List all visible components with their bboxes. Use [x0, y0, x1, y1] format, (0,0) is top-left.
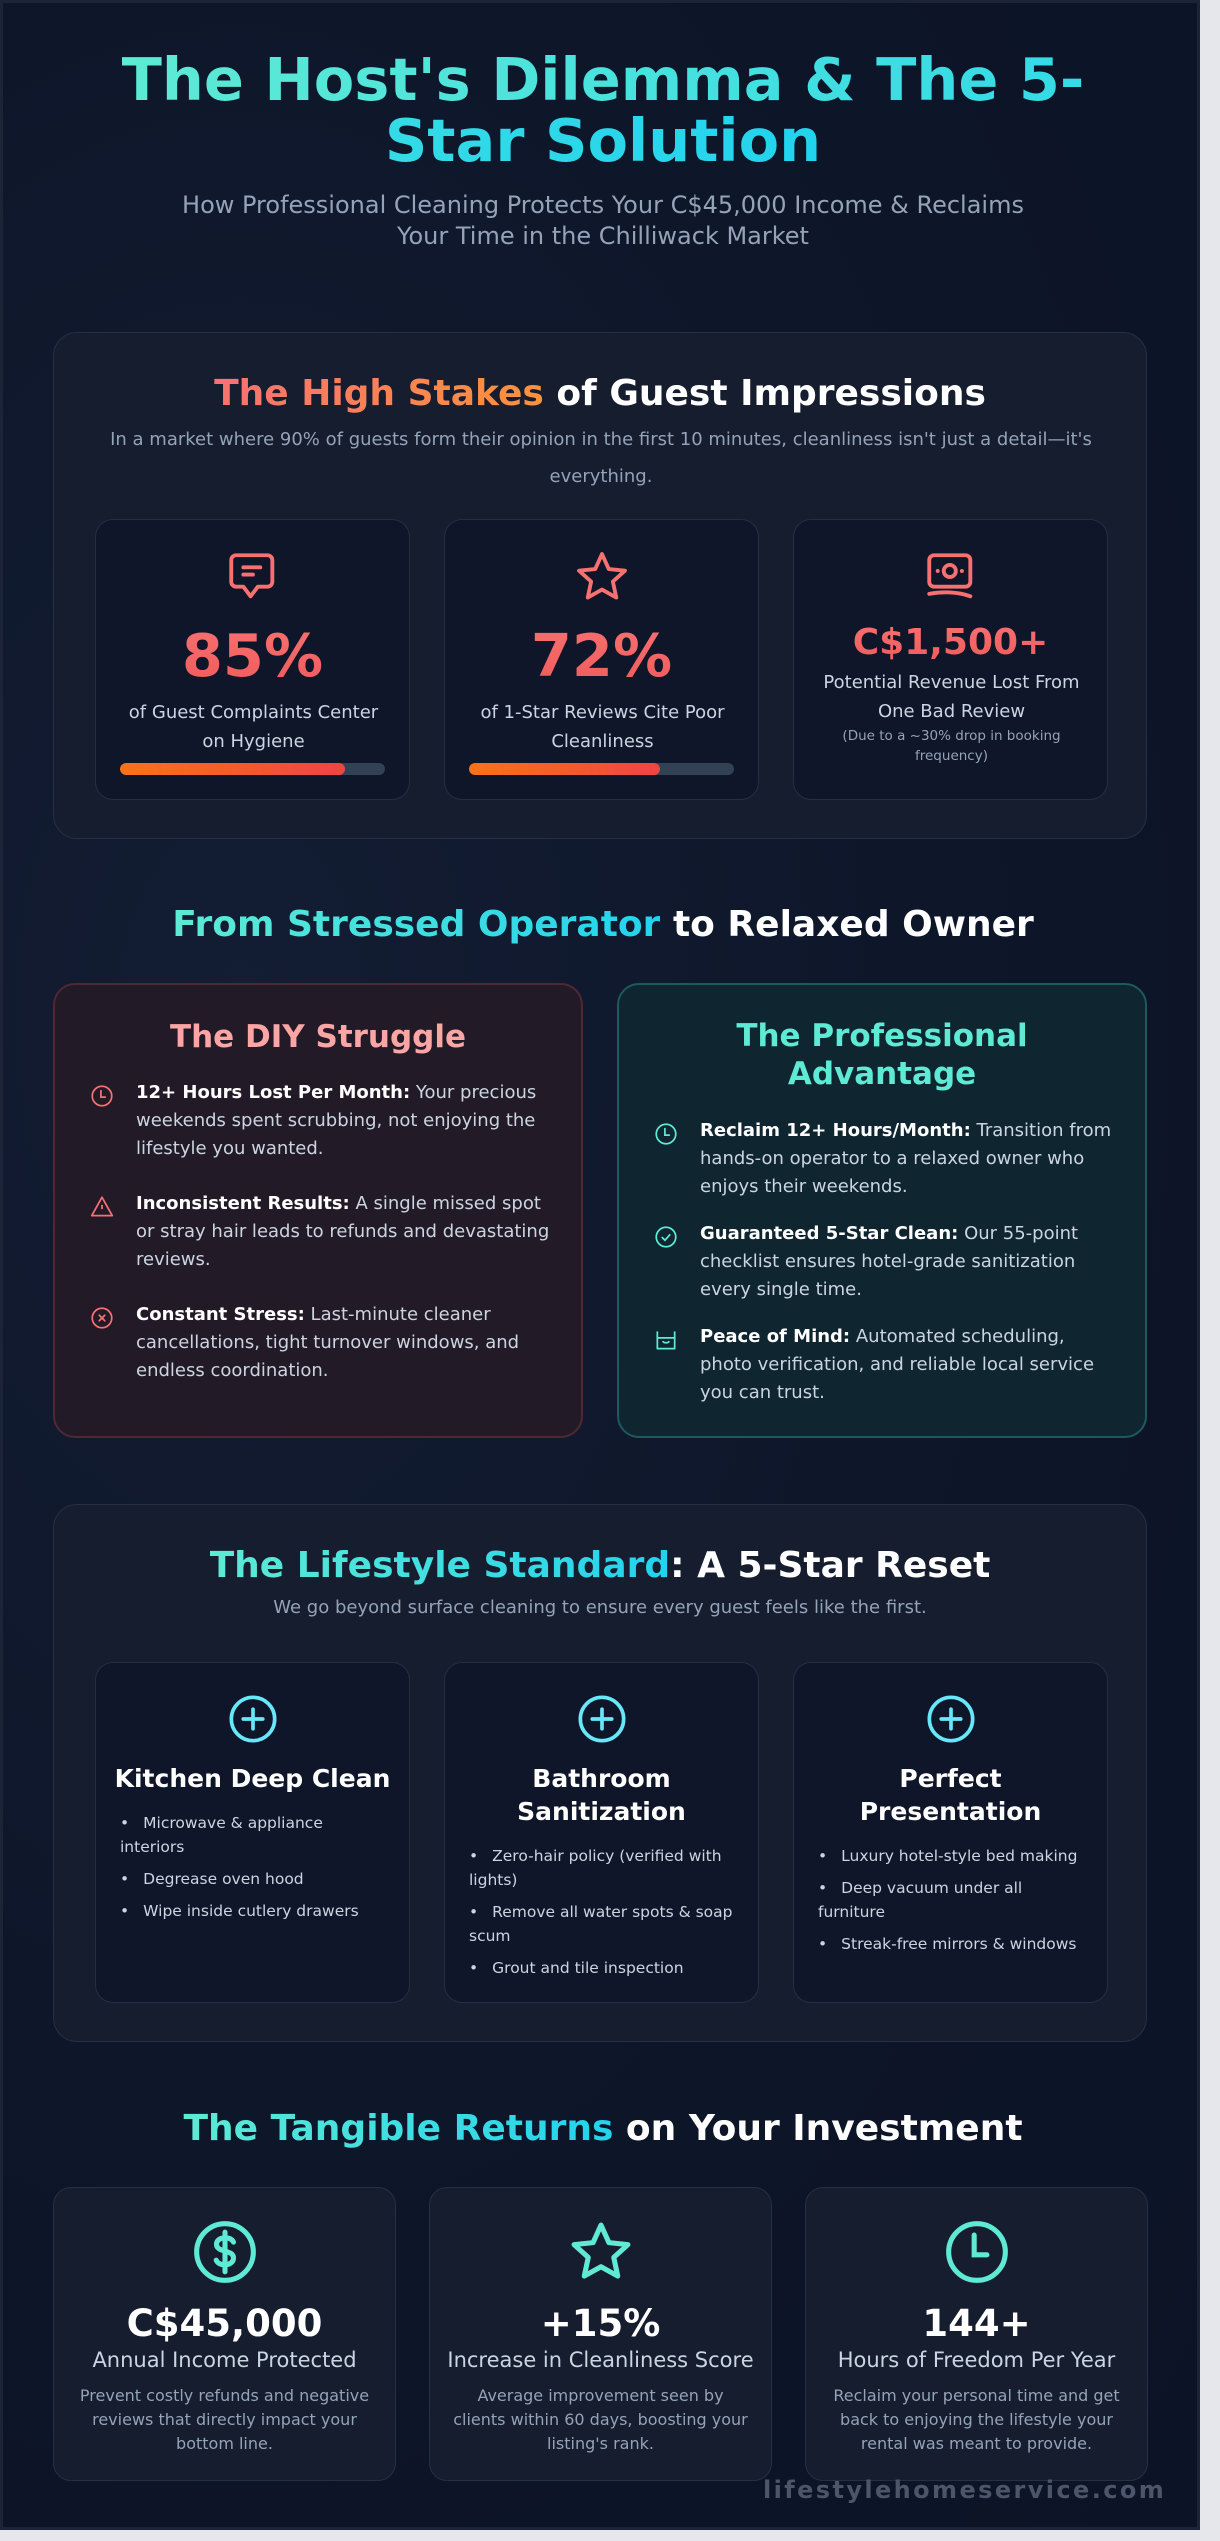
heading: high stakes: The High Stakes of Guest Impressions: [214, 373, 986, 414]
progress bar: [120, 763, 385, 775]
card: kitchen: [95, 1662, 410, 2003]
panel: high stakes: [53, 332, 1147, 839]
card: bathroom: [444, 1662, 759, 2003]
subtitle: [182, 191, 1024, 250]
card title: Sanitization: [517, 1797, 686, 1826]
bullets: Zero-hair policy (verified with lights): [469, 1847, 722, 1889]
label: Annual Income Protected: [92, 2348, 357, 2372]
stat label: Potential Revenue Lost From One Bad Review: [823, 672, 1080, 722]
card: income: [53, 2187, 396, 2481]
bullets: [120, 1814, 359, 1920]
stat card: 85%: [95, 519, 410, 800]
intro text: We go beyond surface cleaning to ensure every guest feels like the first.: [273, 1597, 927, 1618]
title: Star Solution: [385, 106, 821, 175]
panel: lifestyle standard: [53, 1504, 1147, 2042]
card title: Presentation: [860, 1797, 1041, 1826]
heading: professional: Advantage: [788, 1056, 976, 1092]
stat value: 85%: [182, 621, 323, 690]
bullets: Luxury hotel-style bed making: [841, 1847, 1077, 1865]
progress bar: [469, 763, 734, 775]
title: [122, 45, 1084, 175]
card: hours: [805, 2187, 1148, 2481]
card title: [860, 1764, 1041, 1826]
subtitle: Your Time in the Chilliwack Market: [397, 222, 809, 250]
bullets: Streak-free mirrors & windows: [841, 1935, 1076, 1953]
label: Hours of Freedom Per Year: [838, 2348, 1115, 2372]
stat label: of Guest Complaints Center on Hygiene: [129, 702, 378, 752]
heading: tangible returns: The Tangible Returns on Your Investment: [183, 2108, 1023, 2149]
bullets: Microwave & appliance interiors: [120, 1814, 323, 1856]
icon: money: [927, 553, 972, 598]
icon: clock: [946, 2221, 1008, 2283]
stat card: 72%: [444, 519, 759, 800]
panel: DIY struggle: [53, 983, 583, 1438]
card: cleanliness score: [429, 2187, 772, 2481]
bullets: Deep vacuum under all furniture: [818, 1879, 1022, 1921]
card title: [517, 1764, 686, 1826]
title: The Host's Dilemma & The 5-: [122, 45, 1084, 114]
bullets: [469, 1847, 732, 1977]
icon: plus: [578, 1696, 626, 1742]
card title: Bathroom: [532, 1764, 671, 1793]
heading: lifestyle: The Lifestyle Standard: A 5-Star Reset: [210, 1545, 990, 1586]
heading: professional: [736, 1018, 1028, 1092]
panel: professional advantage: [617, 983, 1147, 1438]
label: Increase in Cleanliness Score: [447, 2348, 754, 2372]
description: Average improvement seen by clients within 60 days, boosting your listing's rank.: [453, 2386, 748, 2453]
bullets: Wipe inside cutlery drawers: [143, 1902, 359, 1920]
bullets: Remove all water spots & soap scum: [469, 1903, 732, 1945]
item: hours lost: 12+ Hours Lost Per Month: Your precious weekends spent scrubbing, not enjoying the lifestyle you wanted.: [136, 1082, 536, 1159]
icon: chat: [229, 553, 274, 598]
footnote: (Due to a ~30% drop in booking frequency): [842, 728, 1061, 764]
item: reclaim: Reclaim 12+ Hours/Month: Transition from hands-on operator to a relaxed owner who enjoys their weekends.: [700, 1120, 1111, 1197]
description: Prevent costly refunds and negative reviews that directly impact your bottom line.: [80, 2386, 369, 2453]
heading: stressed to relaxed: From Stressed Operator to Relaxed Owner: [172, 904, 1034, 945]
value: +15%: [541, 2302, 660, 2345]
subtitle: How Professional Cleaning Protects Your C$45,000 Income & Reclaims: [182, 191, 1024, 219]
footer watermark: lifestylehomeservice.com: [763, 2476, 1166, 2504]
item: peace: Peace of Mind: Automated scheduling, photo verification, and reliable local service you can trust.: [700, 1326, 1094, 1403]
value: 144+: [922, 2302, 1031, 2345]
heading: DIY: The DIY Struggle: [170, 1019, 466, 1055]
icon: star: [572, 2222, 630, 2279]
icon: plus: [230, 1696, 276, 1742]
icon: dollar: [194, 2221, 256, 2283]
card: presentation: [793, 1662, 1108, 2003]
bullets: Degrease oven hood: [143, 1870, 304, 1888]
value: C$45,000: [127, 2302, 322, 2345]
bullets: Grout and tile inspection: [492, 1959, 684, 1977]
intro text: In a market where 90% of guests form their opinion in the first 10 minutes, cleanliness isn't just a detail—it's everything.: [110, 429, 1092, 487]
stat value: [445, 620, 758, 692]
bullets: [818, 1847, 1077, 1953]
stat value: [96, 620, 409, 692]
stat card: revenue: [793, 519, 1108, 800]
item: stress: Constant Stress: Last-minute cleaner cancellations, tight turnover windows, and endless coordination.: [136, 1304, 519, 1381]
card title: Kitchen Deep Clean: [115, 1764, 390, 1793]
stat value: 72%: [531, 621, 672, 690]
icon: plus: [928, 1696, 974, 1742]
icon: star: [577, 552, 627, 600]
item: inconsistent: Inconsistent Results: A single missed spot or stray hair leads to refunds and devastating reviews.: [136, 1193, 549, 1270]
item: guaranteed: Guaranteed 5-Star Clean: Our 55-point checklist ensures hotel-grade sanitization every single time.: [700, 1223, 1078, 1300]
description: Reclaim your personal time and get back to enjoying the lifestyle your rental was meant to provide.: [833, 2386, 1120, 2453]
heading: professional: The Professional: [736, 1018, 1028, 1054]
stat value: [794, 620, 1107, 666]
card title: Perfect: [899, 1764, 1002, 1793]
stat value: C$1,500+: [853, 622, 1048, 663]
stat label: of 1-Star Reviews Cite Poor Cleanliness: [480, 702, 725, 752]
